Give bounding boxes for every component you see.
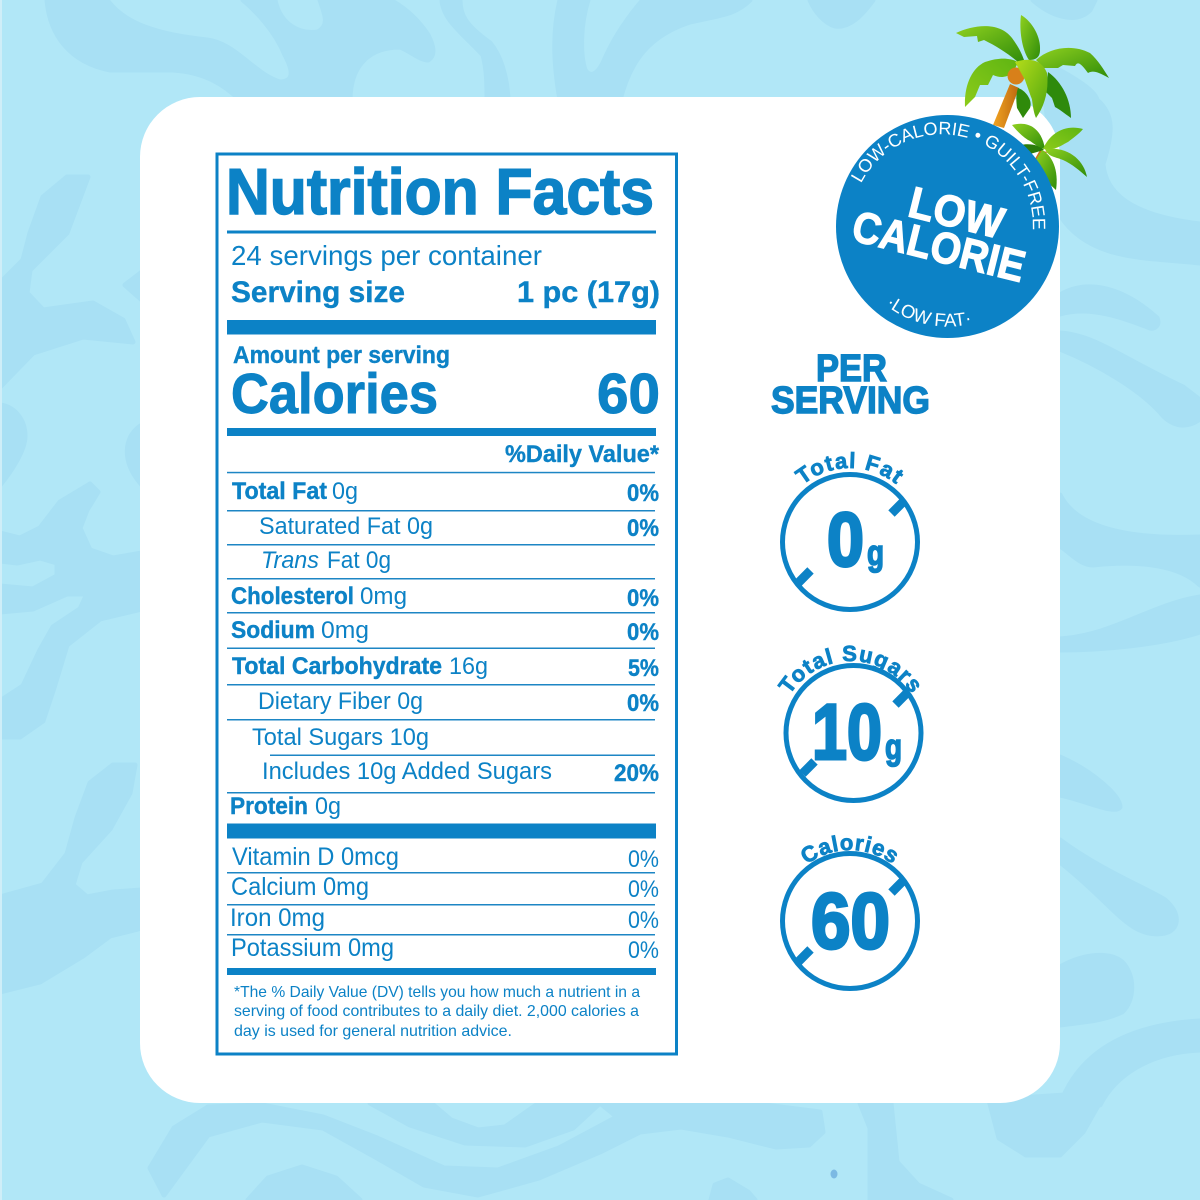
row: cholesterol: 0% [627,585,659,612]
row: vitamin d: Vitamin D 0mcg [232,843,399,871]
ring [782,474,918,610]
calories: Calories [231,362,438,426]
badge circular text: LOW-CALORIE • GUILT-FREE [851,122,1046,230]
heading: Nutrition Facts: Nutrition Facts [226,155,654,228]
value: g [885,726,902,767]
row: trans fat: Fat 0g [327,547,391,574]
divider rules [227,230,656,975]
stat: total fat [780,452,920,612]
stat: total sugars [777,645,924,803]
heading: per serving: PER [816,348,887,390]
row: sodium: 0mg [321,617,369,644]
value: 10 [812,687,882,776]
row: potassium: Potassium 0mg [231,934,394,962]
row: saturated fat [259,513,659,542]
badge heading: CALORIE [847,202,1030,292]
stat: calories [780,834,920,991]
row: potassium: 0% [628,937,659,964]
row: total fat [232,478,659,507]
row: calcium: 0% [628,876,659,903]
panel border [217,154,676,1054]
footnote: serving of food contributes to a daily diet. 2,000 calories a [234,1003,639,1020]
value: 0 [827,498,864,583]
calories: 60 [597,362,660,426]
row: cholesterol: Cholesterol [231,583,354,610]
heading: per serving [771,348,930,422]
row: total fat: 0g [332,478,358,505]
footnote: *The % Daily Value (DV) tells you how much a nutrient in a [234,984,640,1001]
servings per container: 24 servings per container [231,240,542,271]
row: protein: 0g [315,793,341,820]
row: added sugars: 20% [614,760,659,787]
row: sodium: Sodium [231,617,315,644]
row: total carbohydrate [232,653,659,682]
row: dietary fiber [258,688,659,717]
icon: palm trees [956,15,1109,190]
heading: per serving: SERVING [771,380,930,422]
row: dietary fiber: Dietary Fiber 0g [258,688,423,715]
row: added sugars [262,758,659,787]
nutrition facts panel [217,154,676,1054]
label: Total Sugars [777,645,920,692]
value: 60 [811,876,890,965]
amount per serving: Amount per serving [233,342,450,369]
badge: low calorie [836,115,1059,338]
badge heading [847,166,1039,292]
row: total carbohydrate: 16g [449,653,488,680]
row: cholesterol [231,583,659,612]
row: added sugars: Includes 10g Added Sugars [262,758,552,785]
row: vitamin d: 0% [628,846,659,873]
row: total carbohydrate: 5% [628,655,659,682]
large palm [956,15,1109,128]
ring [786,666,921,800]
row: potassium [231,934,659,964]
ring [782,854,918,988]
row: calcium: Calcium 0mg [231,873,369,901]
row: trans fat [261,547,391,574]
row: vitamin d [232,843,659,873]
row: saturated fat: 0% [627,515,659,542]
white panel [140,97,1060,1103]
row: total fat: 0% [627,480,659,507]
daily value header: %Daily Value* [505,441,660,468]
row: saturated fat: Saturated Fat 0g [259,513,433,540]
badge bottom text: ·LOW FAT· [890,298,970,327]
row: dietary fiber: 0% [627,690,659,717]
footnote: day is used for general nutrition advice. [234,1023,512,1040]
value: g [867,532,884,573]
label: Calories [801,834,898,863]
row: total sugars: Total Sugars 10g [252,724,429,751]
row: iron: Iron 0mg [230,904,325,932]
serving size: 1 pc (17g) [517,276,660,309]
row: sodium [231,617,659,646]
row: protein: Protein [230,793,308,820]
row: trans fat: Trans [261,547,319,574]
row: total fat: Total Fat [232,478,327,505]
row: sodium: 0% [627,619,659,646]
row: calcium [231,873,659,903]
row: iron: 0% [628,907,659,934]
label: Total Fat [794,452,904,484]
row: iron [230,904,659,934]
serving size: Serving size [231,276,405,309]
calories [231,362,660,426]
small palm [1012,124,1087,190]
row: total carbohydrate: Total Carbohydrate [232,653,442,680]
row: cholesterol: 0mg [360,583,407,610]
badge heading: LOW [904,178,1009,249]
footnote [234,984,640,1040]
serving size [231,276,660,309]
